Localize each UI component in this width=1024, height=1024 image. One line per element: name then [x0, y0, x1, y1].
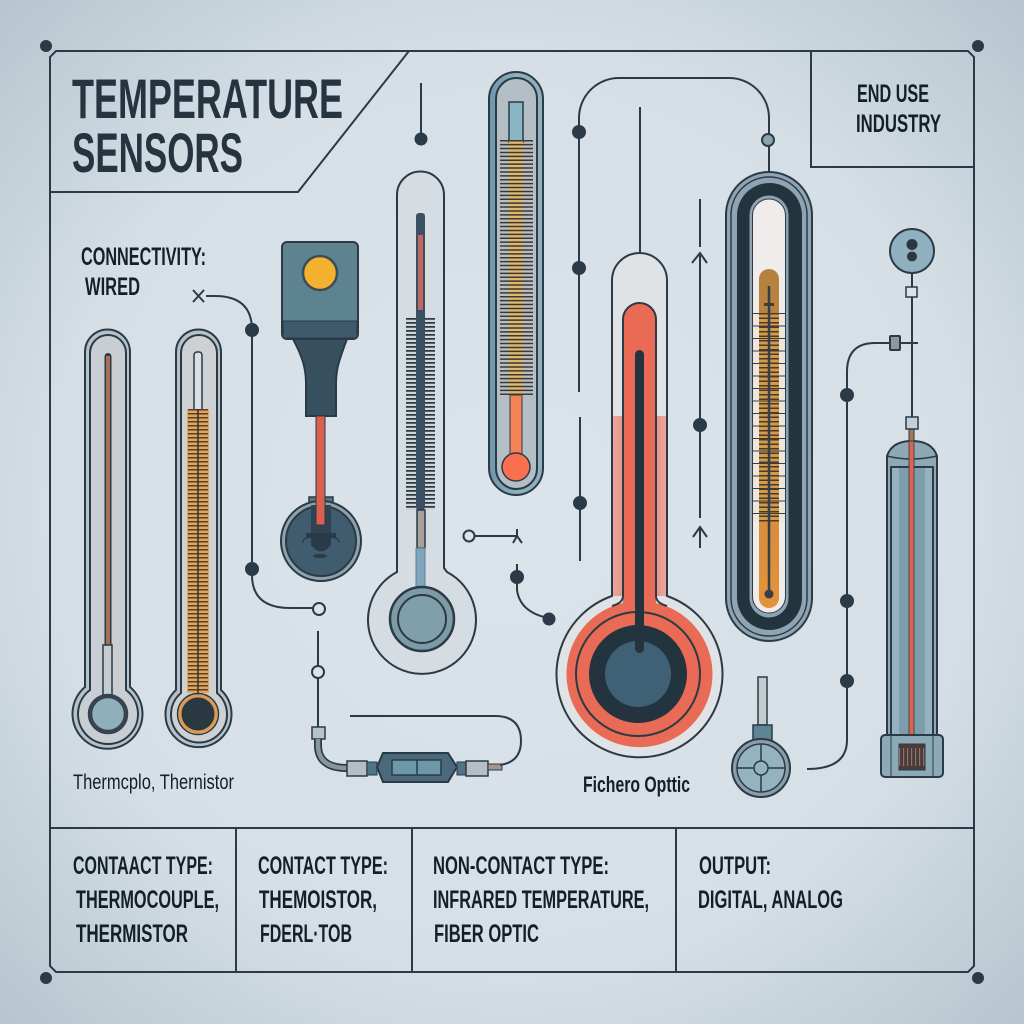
panel: output: OUTPUT: [699, 852, 771, 880]
curved wire with dots [511, 564, 554, 624]
tube sensor with top connector [881, 229, 943, 777]
panel: non-contact type [433, 852, 649, 948]
panel: non-contact type: FIBER OPTIC [434, 920, 539, 948]
panel: contact type thermocouple: THERMOCOUPLE, [76, 886, 219, 914]
panel: contact type thermocouple [73, 852, 219, 948]
title: TEMPERATURE [72, 67, 343, 130]
open circle drop line [312, 631, 324, 727]
glass bulb probe sensor [368, 172, 476, 674]
arrow lines [692, 199, 707, 548]
thermistor sensor [166, 330, 231, 747]
panel: contact type themoistor: THEMOISTOR, [259, 886, 377, 914]
panel: contact type themoistor [258, 852, 388, 948]
connectivity label: WIRED [85, 273, 140, 301]
title: SENSORS [72, 121, 243, 184]
panel: contact type themoistor: CONTACT TYPE: [258, 852, 388, 880]
title [72, 67, 343, 184]
panel: contact type thermocouple: THERMISTOR [76, 920, 188, 948]
panel: contact type themoistor: FDERL·TOB [260, 920, 352, 948]
coil thermometer sensor [489, 72, 543, 495]
capsule ladder sensor [726, 172, 812, 641]
large red infrared sensor [556, 107, 722, 757]
inline cable module [312, 716, 521, 782]
small gauge sensor [732, 677, 790, 797]
top pin line [416, 83, 426, 144]
connectivity label [81, 243, 206, 301]
panel: output [698, 852, 843, 914]
end use industry label: INDUSTRY [856, 110, 941, 138]
panel: non-contact type: INFRARED TEMPERATURE, [433, 886, 649, 914]
thermocouple sensor [73, 330, 142, 749]
caption: thermocouple and thermistor: Thermcplo, Thernistor [73, 771, 234, 794]
box sensor with probe [281, 242, 361, 581]
caption: fiber optic: Fichero Opttic [583, 772, 690, 797]
panel: contact type thermocouple: CONTAACT TYPE: [73, 852, 213, 880]
side wire [807, 336, 918, 769]
end use industry label: END USE [857, 80, 929, 108]
end use industry label [856, 80, 941, 138]
connectivity label: CONNECTIVITY: [81, 243, 206, 271]
connector wire with cross end [193, 290, 325, 615]
top arc wire [573, 78, 774, 561]
panel: output: DIGITAL, ANALOG [698, 886, 843, 914]
small pin connector [464, 529, 522, 543]
panel: non-contact type: NON-CONTACT TYPE: [433, 852, 609, 880]
